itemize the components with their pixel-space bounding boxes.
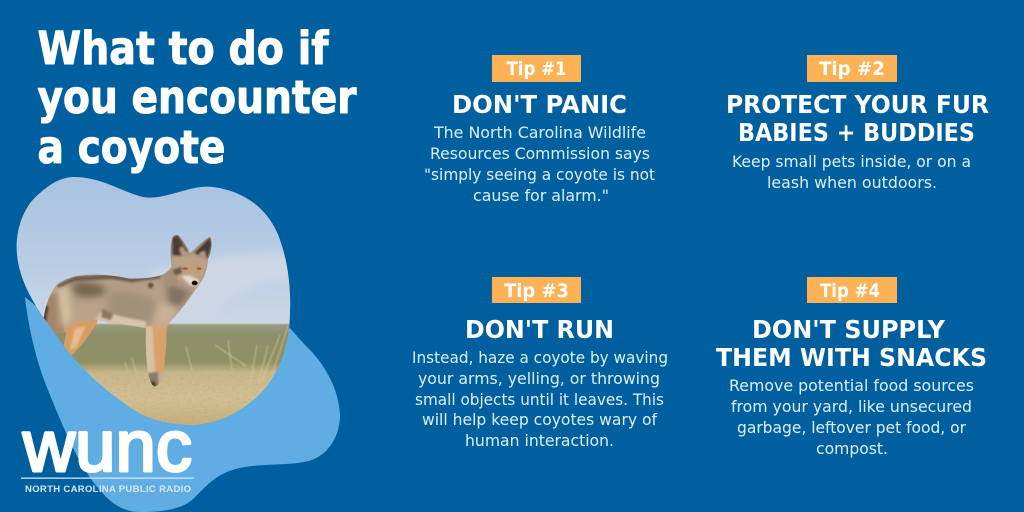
paw <box>148 372 159 388</box>
coyote photo <box>16 177 290 425</box>
tip 1 text: "simply seeing a coyote is not <box>424 165 655 184</box>
left ear <box>172 235 188 256</box>
tip 2 text: leash when outdoors. <box>767 173 937 192</box>
belly shadow <box>102 308 113 320</box>
tip 4 text: from your yard, like unsecured <box>731 397 972 416</box>
panel: tip 1 <box>424 55 655 205</box>
right ear rim <box>198 250 207 258</box>
tip 3 text: Instead, haze a coyote by waving <box>412 348 668 367</box>
panel: tip 2 <box>726 55 989 192</box>
logo tagline: NORTH CAROLINA PUBLIC RADIO <box>25 484 191 495</box>
tip 2 heading <box>726 90 989 147</box>
tip 2 text <box>732 152 971 192</box>
tip 1 text: The North Carolina Wildlife <box>433 123 646 142</box>
clouds <box>152 250 290 302</box>
neck light <box>155 302 178 325</box>
tip 2 text: Keep small pets inside, or on a <box>732 152 971 171</box>
hip light fur <box>58 285 72 328</box>
right ear <box>194 237 212 258</box>
panel: tip 4 <box>716 277 987 458</box>
tip 3 text: your arms, yelling, or throwing <box>418 369 660 388</box>
tip 1 heading: DON'T PANIC <box>452 90 627 119</box>
tip 4 badge <box>807 277 897 303</box>
tip 1 text <box>424 123 655 205</box>
tip 3 text: small objects until it leaves. This <box>415 390 664 409</box>
sky <box>16 177 290 330</box>
neck <box>162 267 177 287</box>
title: you encounter <box>38 71 357 124</box>
belly light <box>95 311 147 328</box>
tip 3 heading: DON'T RUN <box>465 315 614 344</box>
tip 2 heading: PROTECT YOUR FUR <box>726 90 989 119</box>
tip 4 text: garbage, leftover pet food, or <box>737 418 966 437</box>
tail <box>44 292 65 332</box>
tip 3 badge <box>492 277 581 303</box>
tip 4 text <box>729 376 974 458</box>
paw dark <box>150 382 156 387</box>
grass field <box>48 323 290 425</box>
logo wordmark: wunc <box>22 407 192 487</box>
tip 2 heading: BABIES + BUDDIES <box>738 118 975 147</box>
muzzle white <box>181 276 199 287</box>
tip 3 text <box>412 348 668 450</box>
tip 4 heading <box>716 315 987 372</box>
tip 1 text: Resources Commission says <box>430 144 650 163</box>
tip 4 heading: THEM WITH SNACKS <box>716 343 987 372</box>
tip 4 text: compost. <box>816 439 888 458</box>
title: What to do if <box>38 22 329 75</box>
shoulder spot <box>148 283 153 288</box>
tip 2 badge: Tip #2 <box>819 58 885 80</box>
logo rule <box>21 478 194 479</box>
cheek dark <box>172 267 182 276</box>
WUNC logo <box>21 407 194 495</box>
near front leg <box>152 325 168 373</box>
head <box>172 256 208 282</box>
coyote base silhouette <box>44 235 212 386</box>
rear leg highlight <box>70 327 85 350</box>
dry grass blades <box>125 326 288 385</box>
panel: tip 3 <box>412 277 668 450</box>
title: a coyote <box>38 121 226 174</box>
tip 4 text: Remove potential food sources <box>729 376 974 395</box>
back stripe <box>57 274 162 288</box>
tip 3 text: human interaction. <box>465 431 614 450</box>
tip 1 badge: Tip #1 <box>506 58 566 80</box>
nose <box>192 281 198 285</box>
tip 3 badge: Tip #3 <box>504 280 569 302</box>
chest shade <box>167 282 192 308</box>
tip 1 text: cause for alarm." <box>473 186 609 205</box>
dark saddle fur <box>72 282 107 297</box>
tail tip <box>44 304 50 322</box>
left ear rim <box>179 246 188 257</box>
tip 1 badge <box>492 55 581 82</box>
ribs shade <box>107 291 160 325</box>
far front leg <box>145 326 155 374</box>
tip 2 badge <box>807 55 897 82</box>
right eye <box>197 267 201 270</box>
light blue decorative blob <box>25 297 340 512</box>
grass grain texture <box>98 378 269 423</box>
left eye <box>183 267 188 270</box>
tip 4 badge: Tip #4 <box>820 280 880 302</box>
coyote <box>44 235 212 386</box>
tip 3 text: will help keep coyotes wary of <box>422 410 657 429</box>
tip 4 heading: DON'T SUPPLY <box>752 315 946 344</box>
title <box>38 22 357 174</box>
rear leg <box>63 320 98 357</box>
